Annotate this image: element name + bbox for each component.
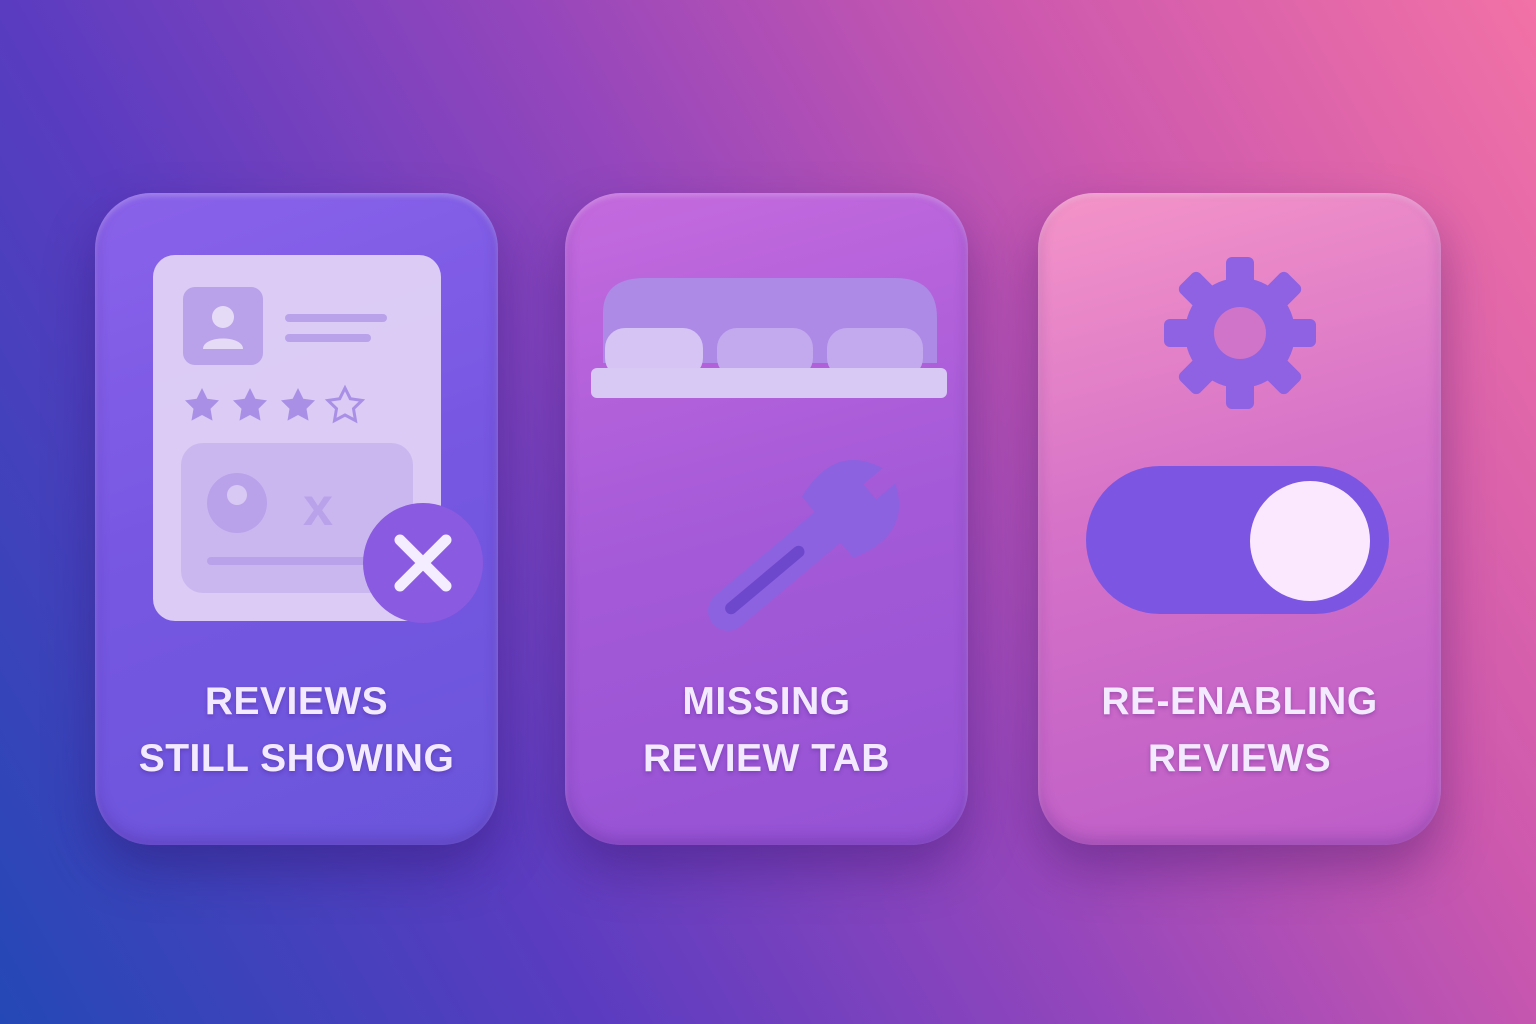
label (643, 680, 890, 780)
card 1: reviews still showing (95, 193, 498, 845)
card 2: missing review tab (565, 193, 968, 845)
icon: review document with x (153, 255, 483, 623)
card 3: re-enabling reviews (1038, 193, 1441, 845)
label (139, 680, 454, 780)
label: RE-ENABLING (1101, 680, 1378, 723)
label: REVIEWS (205, 680, 388, 723)
label: REVIEWS (1148, 737, 1331, 780)
icon: tab bar and wrench (591, 278, 947, 631)
label: STILL SHOWING (139, 737, 454, 780)
label: REVIEW TAB (643, 737, 890, 780)
label: MISSING (682, 680, 851, 723)
icon: review document with x: x (303, 477, 333, 537)
label (1101, 680, 1378, 780)
icon: gear and toggle (1086, 257, 1389, 614)
